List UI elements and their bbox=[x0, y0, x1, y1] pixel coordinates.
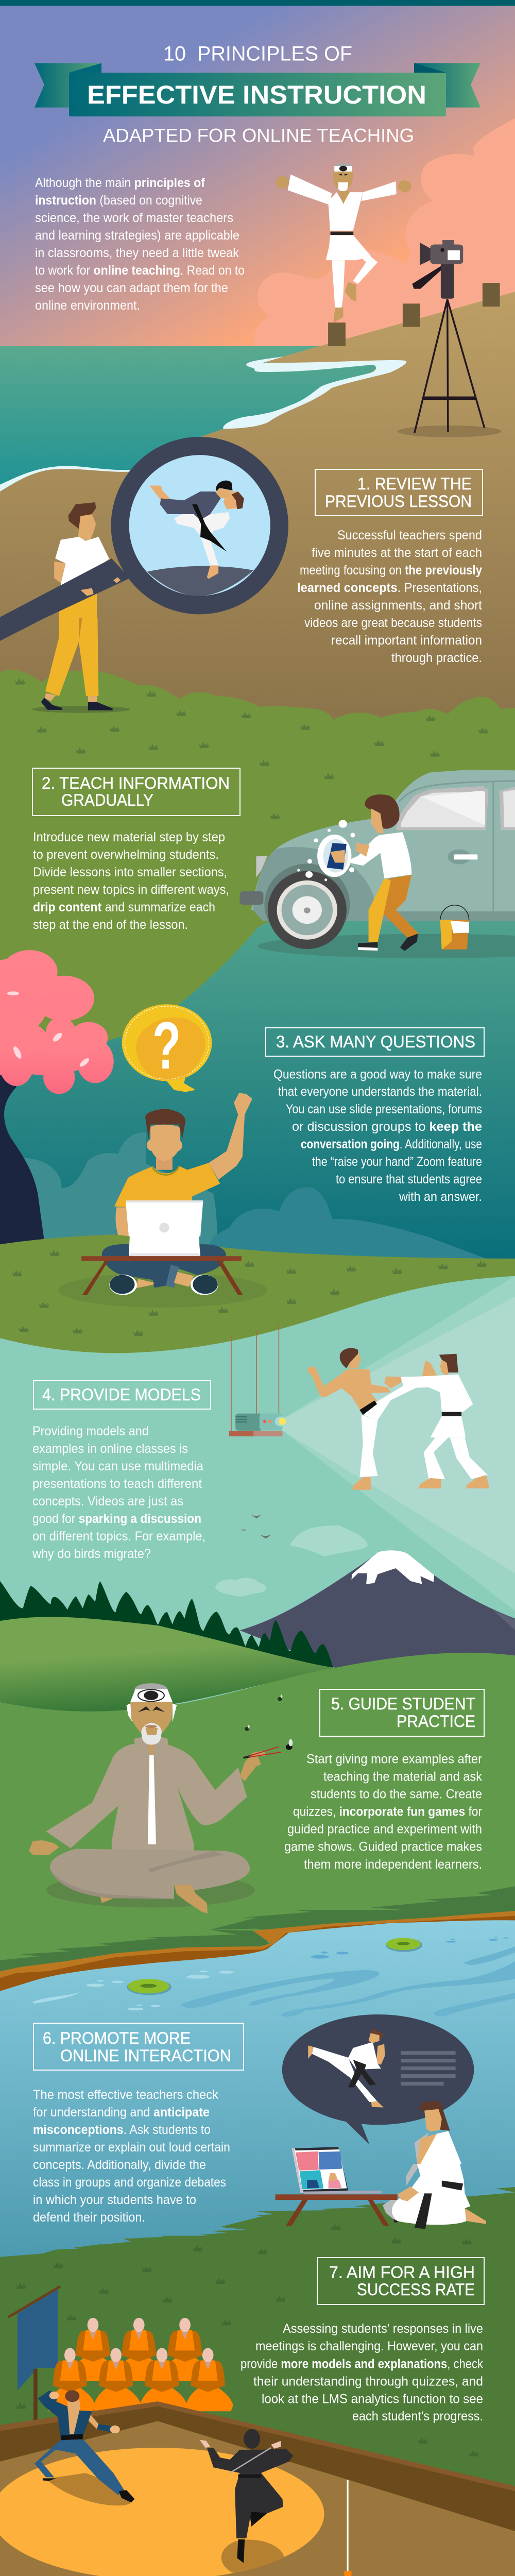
heading: SUCCESS RATE bbox=[357, 2280, 475, 2299]
heading: GRADUALLY bbox=[61, 791, 153, 809]
heading bbox=[315, 469, 483, 516]
body text: on different topics. For example, bbox=[32, 1529, 205, 1544]
icon: video camera on tripod bbox=[412, 240, 463, 299]
tree trunk bbox=[0, 1038, 44, 1251]
student raising hand bbox=[114, 1093, 252, 1241]
body text: summarize or explain out loud certain bbox=[33, 2140, 230, 2155]
body text bbox=[32, 1424, 205, 1561]
title block bbox=[35, 42, 480, 146]
text: intro paragraph: see how you can adapt them for the bbox=[35, 281, 228, 295]
illustration: meditating master with chopsticks bbox=[29, 1683, 293, 1913]
body text: students to do the same. Create bbox=[311, 1787, 482, 1801]
man bbox=[297, 794, 419, 951]
heading: ONLINE INTERACTION bbox=[60, 2046, 231, 2065]
body text: for understanding and anticipate bbox=[33, 2105, 210, 2120]
mountain bbox=[240, 1550, 515, 1668]
blue fighter bbox=[35, 2390, 134, 2502]
body text: concepts. Videos are just as bbox=[32, 1494, 183, 1509]
body text: or discussion groups to keep the bbox=[292, 1120, 482, 1134]
background: mint sky bbox=[0, 1266, 515, 1730]
man's legs bbox=[32, 618, 130, 713]
illustration: bank grass south bbox=[0, 2187, 515, 2576]
teacher head bbox=[415, 2101, 461, 2164]
illustration: sunset clouds bbox=[253, 118, 515, 346]
desk and crossed legs bbox=[58, 1236, 267, 1308]
text: intro paragraph: Although the main principles of bbox=[35, 176, 205, 190]
body text: provide more models and explanations, check bbox=[241, 2357, 483, 2371]
heading: 4. PROVIDE MODELS bbox=[42, 1385, 201, 1404]
magnifying glass bbox=[111, 437, 288, 614]
ribbon: EFFECTIVE INSTRUCTION bbox=[87, 80, 426, 109]
body text: game shows. Guided practice makes bbox=[284, 1839, 482, 1854]
body text: Divide lessons into smaller sections, bbox=[33, 865, 227, 879]
text: intro paragraph: in classrooms, they need a little tweak bbox=[35, 246, 239, 260]
body text: Introduce new material step by step bbox=[33, 830, 225, 844]
wheel bbox=[264, 863, 350, 949]
hand with chopsticks bbox=[240, 1747, 281, 1781]
body text bbox=[273, 1067, 482, 1204]
grass tufts bbox=[15, 678, 488, 819]
panel: 5. guide student practice bbox=[284, 1689, 484, 1872]
body text: Assessing students' responses in live bbox=[283, 2321, 483, 2336]
body text: five minutes at the start of each bbox=[312, 546, 482, 560]
body text: that everyone understands the material. bbox=[278, 1084, 482, 1099]
text: intro paragraph: instruction (based on cognitive bbox=[35, 193, 202, 208]
icon: question mark bubble bbox=[122, 1004, 212, 1092]
body text: concepts. Additionally, divide the bbox=[33, 2158, 206, 2172]
grass tufts bbox=[16, 2224, 479, 2456]
lily pads bbox=[127, 1938, 422, 1995]
heading bbox=[317, 2258, 484, 2304]
kicking figure bbox=[308, 2028, 385, 2108]
body text: examples in online classes is bbox=[32, 1442, 188, 1456]
body text: simple. You can use multimedia bbox=[32, 1459, 203, 1473]
body text: recall important information bbox=[331, 633, 482, 648]
lap bbox=[50, 1849, 250, 1899]
body text: each student's progress. bbox=[352, 2409, 483, 2424]
body text: You can use slide presentations, forums bbox=[286, 1102, 482, 1116]
illustration: teal hillside bbox=[0, 920, 515, 1263]
text: intro paragraph bbox=[35, 176, 245, 313]
body text: present new topics in different ways, bbox=[33, 883, 229, 897]
body text: Providing models and bbox=[32, 1424, 149, 1438]
top bar bbox=[0, 0, 515, 6]
throw: fighters in lens bbox=[149, 481, 244, 579]
body text: their understanding through quizzes, and bbox=[253, 2374, 483, 2388]
body text: meetings is challenging. However, you can bbox=[255, 2339, 483, 2353]
tree foliage bbox=[0, 950, 114, 1094]
shirtless fighter bbox=[307, 1348, 428, 1490]
body text bbox=[33, 830, 229, 932]
text: intro paragraph: to work for online teaching. Read on to bbox=[35, 263, 245, 278]
magnifier handle bbox=[0, 558, 130, 641]
panel: 6. promote more online interaction bbox=[33, 2014, 486, 2229]
question mark: ? bbox=[152, 1008, 181, 1083]
grass tufts bbox=[12, 1250, 487, 1336]
background: sea bbox=[0, 346, 515, 542]
body text: learned concepts. Presentations, bbox=[297, 581, 482, 595]
background: beach bbox=[0, 292, 515, 762]
hanging lamp bbox=[329, 2480, 367, 2576]
monks bbox=[47, 2318, 233, 2411]
treeline bbox=[0, 1581, 333, 1668]
body text: step at the end of the lesson. bbox=[33, 918, 188, 932]
body text: them more independent learners. bbox=[304, 1857, 482, 1872]
flies bbox=[245, 1694, 293, 1750]
river bbox=[0, 1920, 515, 2262]
foam bbox=[0, 357, 406, 492]
illustration: river bank and water bbox=[0, 1886, 515, 2262]
heading: 2. TEACH INFORMATION bbox=[42, 774, 230, 792]
illustration: grass field bbox=[0, 670, 515, 1072]
panel: 1. review the previous lesson bbox=[297, 469, 483, 665]
illustration: spotlight and lamp bbox=[0, 2448, 515, 2576]
duel: blue fighter and ninja bbox=[35, 2390, 294, 2563]
body text: Questions are a good way to make sure bbox=[273, 1067, 482, 1082]
body text: look at the LMS analytics function to see bbox=[262, 2392, 483, 2406]
body text bbox=[284, 1752, 482, 1872]
illustration: man washing car bbox=[240, 770, 515, 951]
text: intro paragraph: science, the work of master teachers bbox=[35, 211, 233, 225]
body text: presentations to teach different bbox=[32, 1477, 202, 1491]
projector on swing bbox=[229, 1414, 287, 1436]
bucket bbox=[440, 905, 469, 950]
heading: PREVIOUS LESSON bbox=[325, 492, 472, 511]
teal bushes bbox=[23, 1132, 486, 1263]
body text: good for sparking a discussion bbox=[32, 1512, 201, 1526]
heading bbox=[32, 768, 240, 816]
dark grass fringe bbox=[0, 1886, 515, 1975]
text: intro paragraph: online environment. bbox=[35, 298, 140, 313]
text: intro paragraph: and learning strategies) are applicable bbox=[35, 228, 239, 243]
body text: why do birds migrate? bbox=[32, 1547, 151, 1561]
title line 1: 10 PRINCIPLES OF bbox=[163, 42, 352, 65]
body text: guided practice and experiment with bbox=[287, 1822, 482, 1836]
clouds bbox=[215, 1526, 368, 1597]
subtitle: ADAPTED FOR ONLINE TEACHING bbox=[103, 125, 414, 146]
illustration: mountain landscape bbox=[0, 1526, 515, 2019]
illustration: projector and fighters bbox=[229, 1276, 515, 1611]
tripod bbox=[398, 299, 501, 437]
projector light bbox=[282, 1276, 515, 1611]
heading: 6. PROMOTE MORE bbox=[43, 2029, 191, 2047]
heading bbox=[266, 1028, 484, 1056]
body text: Successful teachers spend bbox=[337, 528, 482, 543]
robe bbox=[46, 1737, 247, 1855]
head bbox=[127, 1683, 177, 1744]
illustration: crane pose master bbox=[276, 163, 411, 323]
birds bbox=[241, 1515, 271, 1538]
body text: teaching the material and ask bbox=[323, 1769, 482, 1784]
man with magnifier bbox=[54, 502, 110, 618]
body text: the “raise your hand” Zoom feature bbox=[312, 1155, 482, 1169]
body text: with an answer. bbox=[399, 1190, 482, 1204]
body text: conversation going. Additionally, use bbox=[301, 1137, 482, 1151]
panel: 3. ask many questions bbox=[152, 1008, 484, 1204]
body text: in which your students have to bbox=[33, 2193, 196, 2207]
body text: to ensure that students agree bbox=[336, 1172, 482, 1187]
hill with desk bbox=[0, 1234, 515, 1353]
car shadow bbox=[258, 934, 515, 958]
panel: 2. teach information gradually bbox=[32, 768, 240, 932]
body text bbox=[241, 2321, 483, 2424]
body text: videos are great because students bbox=[304, 616, 482, 630]
banner bbox=[8, 2286, 60, 2452]
heading: 5. GUIDE STUDENT bbox=[331, 1694, 475, 1713]
laptop lid bbox=[126, 1200, 203, 1236]
body text: online assignments, and short bbox=[314, 598, 482, 613]
swing ropes bbox=[231, 1323, 279, 1432]
body text: through practice. bbox=[391, 651, 482, 665]
heading bbox=[320, 1689, 484, 1736]
laptop bbox=[291, 2147, 348, 2193]
body text: meeting focusing on the previously bbox=[300, 563, 482, 578]
body text: class in groups and organize debates bbox=[33, 2175, 226, 2190]
ribbon bbox=[35, 63, 480, 116]
illustration: tree and question bubble bbox=[0, 950, 252, 1251]
white gi fighter bbox=[384, 1354, 489, 1488]
posts bbox=[328, 283, 500, 346]
background: sky bbox=[0, 6, 515, 346]
car windows bbox=[396, 786, 515, 830]
body text: drip content and summarize each bbox=[33, 900, 215, 914]
heading: PRACTICE bbox=[397, 1712, 475, 1731]
kneeling teacher bbox=[275, 2164, 486, 2229]
body text: to prevent overwhelming students. bbox=[33, 848, 219, 862]
green hills bbox=[0, 1617, 515, 2019]
dojo walls and floor bbox=[0, 2401, 515, 2576]
body text: Start giving more examples after bbox=[306, 1752, 482, 1766]
heading: 1. REVIEW THE bbox=[357, 474, 472, 493]
heading bbox=[33, 2023, 244, 2070]
river currents bbox=[181, 1946, 515, 2016]
body text: misconceptions. Ask students to bbox=[33, 2123, 211, 2137]
panel: 4. provide models bbox=[32, 1381, 211, 1561]
body text: defend their position. bbox=[33, 2210, 145, 2225]
heading: 7. AIM FOR A HIGH bbox=[329, 2263, 475, 2281]
panel: 7. aim for a high success rate bbox=[241, 2258, 484, 2424]
body text bbox=[33, 2088, 230, 2225]
ripples bbox=[32, 1937, 509, 2010]
heading: 3. ASK MANY QUESTIONS bbox=[276, 1032, 475, 1051]
body text: The most effective teachers check bbox=[33, 2088, 218, 2102]
heading bbox=[33, 1381, 211, 1409]
body text bbox=[297, 528, 482, 665]
illustration: beach easel and teacher bbox=[0, 283, 501, 641]
river bank bbox=[0, 1911, 515, 1993]
speech bubble bbox=[282, 2014, 474, 2193]
ninja bbox=[200, 2429, 294, 2563]
body text: quizzes, incorporate fun games for bbox=[293, 1804, 482, 1819]
